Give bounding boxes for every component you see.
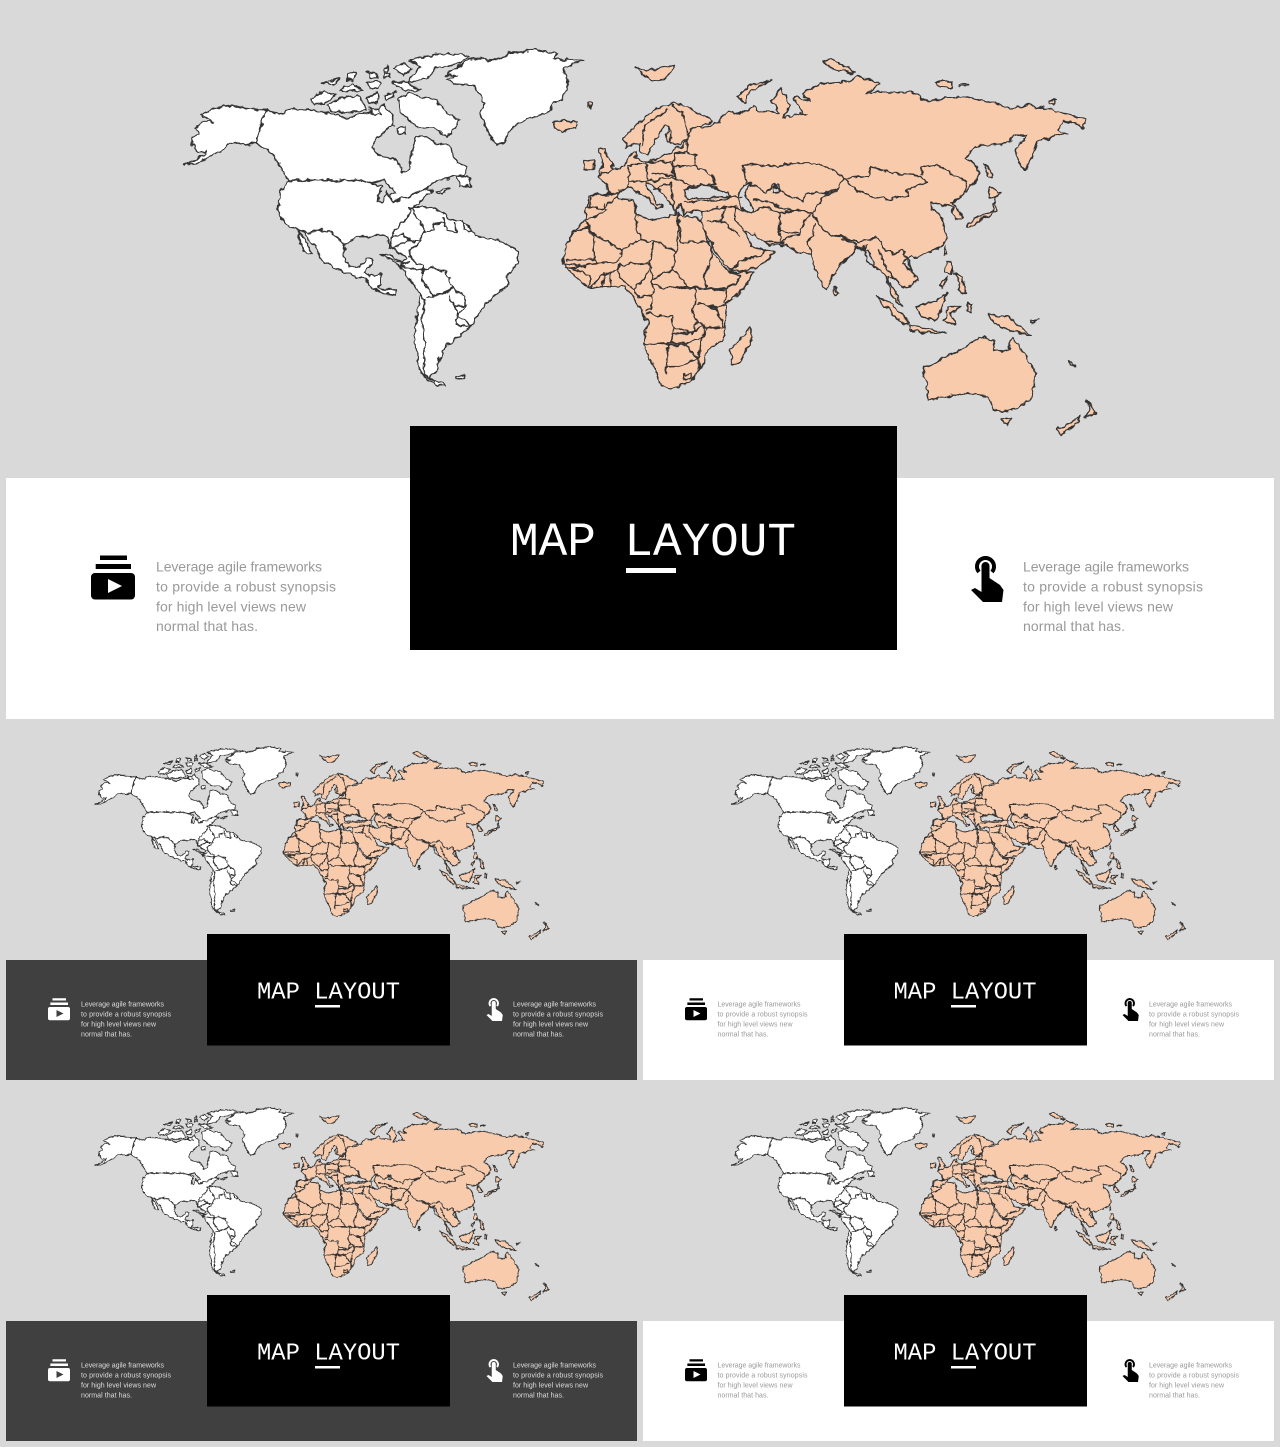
text block: right: to provide a robust synopsis	[1023, 578, 1203, 594]
text block: right: Leverage agile frameworks	[1149, 1002, 1232, 1008]
icon: touch hand	[486, 999, 503, 1021]
icon: play stack	[685, 1359, 707, 1381]
text block: right: Leverage agile frameworks	[513, 1362, 596, 1370]
text block: left: to provide a robust synopsis	[718, 1012, 808, 1018]
title box	[207, 934, 450, 1046]
title box: MAP LAYOUT	[257, 1340, 400, 1368]
small slide: white, top right	[643, 747, 1274, 1080]
text block: right: normal that has.	[1149, 1032, 1200, 1038]
text block: right: for high level views new	[513, 1382, 589, 1390]
world map	[95, 1108, 549, 1300]
icon: play stack	[48, 1359, 70, 1381]
text block: right: Leverage agile frameworks	[1023, 558, 1189, 574]
text block: left: Leverage agile frameworks	[156, 558, 322, 574]
title box	[207, 1295, 450, 1406]
text block: left: to provide a robust synopsis	[81, 1012, 172, 1018]
panel: white strip	[6, 478, 1274, 719]
text block: left: Leverage agile frameworks	[81, 1362, 164, 1370]
title box: MAP LAYOUT	[257, 980, 400, 1006]
text block: right: Leverage agile frameworks	[1149, 1362, 1232, 1370]
text block: left: for high level views new	[81, 1022, 157, 1028]
icon: touch hand	[486, 1360, 503, 1382]
text block: right	[1023, 558, 1203, 634]
panel: dark strip	[6, 960, 637, 1080]
text block: left: for high level views new	[718, 1382, 793, 1390]
text block: right: to provide a robust synopsis	[1149, 1012, 1240, 1018]
text block: left: Leverage agile frameworks	[718, 1002, 801, 1008]
small slide: dark, top left	[6, 747, 637, 1080]
text block: left	[718, 1002, 808, 1038]
world map	[95, 747, 549, 939]
text block: left	[81, 1362, 172, 1400]
text block: left: for high level views new	[156, 598, 307, 614]
text block: right: normal that has.	[513, 1032, 564, 1038]
world map: main	[184, 50, 1096, 435]
text block: left: for high level views new	[718, 1022, 793, 1028]
text block: right: for high level views new	[1023, 598, 1174, 614]
text block: left: Leverage agile frameworks	[718, 1362, 801, 1370]
text block: left	[81, 1002, 172, 1038]
world map	[732, 1108, 1185, 1300]
icon: touch hand	[1122, 1360, 1139, 1382]
text block: left: normal that has.	[81, 1032, 132, 1038]
title box	[844, 934, 1087, 1046]
text block: left	[718, 1362, 808, 1400]
text block: right: normal that has.	[1149, 1392, 1200, 1400]
icon: touch hand	[1122, 999, 1139, 1021]
text block: left: Leverage agile frameworks	[81, 1002, 164, 1008]
text block: right	[1149, 1362, 1240, 1400]
text block: left: normal that has.	[156, 618, 258, 634]
title box: MAP LAYOUT	[894, 1340, 1036, 1368]
text block: right: Leverage agile frameworks	[513, 1002, 596, 1008]
text block: left: normal that has.	[718, 1032, 769, 1038]
text block: right: normal that has.	[1023, 618, 1125, 634]
text block: right	[1149, 1002, 1240, 1038]
main slide	[6, 50, 1274, 719]
world map	[732, 747, 1185, 939]
text block: right: to provide a robust synopsis	[1149, 1372, 1240, 1380]
text block: right: to provide a robust synopsis	[513, 1012, 604, 1018]
text block: right	[513, 1002, 604, 1038]
title box: MAP LAYOUT	[510, 516, 796, 570]
icon: play stack	[48, 998, 70, 1020]
text block: left	[156, 558, 336, 634]
small slide: white, bottom right	[643, 1108, 1274, 1441]
icon: play stack	[91, 556, 135, 600]
text block: right: for high level views new	[513, 1022, 589, 1028]
small slide: dark, bottom left	[6, 1108, 637, 1441]
panel: dark strip	[6, 1321, 637, 1441]
text block: right: to provide a robust synopsis	[513, 1372, 604, 1380]
icon: play stack	[685, 998, 707, 1020]
text block: left: normal that has.	[718, 1392, 769, 1400]
text block: right: for high level views new	[1149, 1382, 1225, 1390]
title box	[844, 1295, 1087, 1406]
icon: touch hand	[971, 558, 1004, 602]
text block: left: for high level views new	[81, 1382, 157, 1390]
title box	[410, 426, 897, 650]
text block: right: normal that has.	[513, 1392, 564, 1400]
text block: left: to provide a robust synopsis	[718, 1372, 808, 1380]
text block: right	[513, 1362, 604, 1400]
panel: white strip	[643, 960, 1274, 1080]
text block: right: for high level views new	[1149, 1022, 1225, 1028]
text block: left: normal that has.	[81, 1392, 132, 1400]
title box: MAP LAYOUT	[894, 980, 1036, 1006]
text block: left: to provide a robust synopsis	[156, 578, 336, 594]
text block: left: to provide a robust synopsis	[81, 1372, 172, 1380]
panel: white strip	[643, 1321, 1274, 1441]
